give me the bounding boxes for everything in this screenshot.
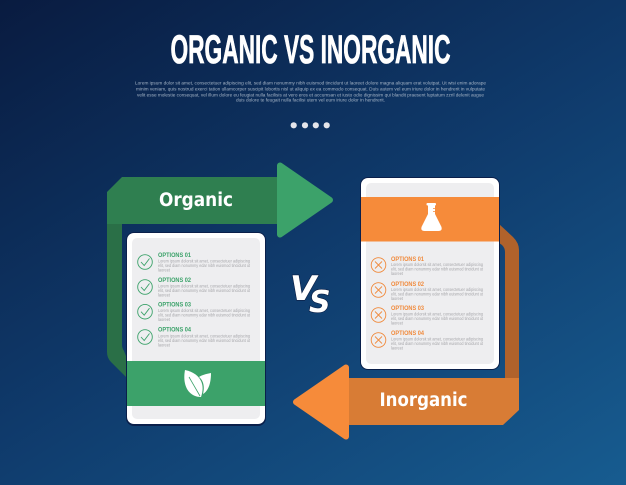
option 2 xyxy=(371,281,484,301)
option 1 xyxy=(138,252,251,272)
intro text block: minim veniam, quis nostrud exerci tation ullamcorper suscipit lobortis nisl ut aliquip ex ea commodo consequat. Duis autem vel eum iriure dolor in hendrerit in vulputate xyxy=(136,86,486,92)
option 4: Lorem ipsum dolorsit sit amet, consectetuer adipiscing xyxy=(158,333,251,338)
option 1: OPTIONS 01 xyxy=(391,256,425,263)
option 4: Lorem ipsum dolorsit sit amet, consectetuer adipiscing xyxy=(391,336,484,342)
option 2: laoreet xyxy=(158,292,171,298)
option 4: OPTIONS 04 xyxy=(158,326,192,334)
option 4: OPTIONS 04 xyxy=(391,330,425,337)
pagination dots xyxy=(291,122,330,128)
option 2: elit, sed diam nonummy edar nibh euismod tincidunt ut xyxy=(391,292,484,296)
VS emblem: V xyxy=(290,269,319,309)
intro text block: duis dolore te feugait nulla facilisi utem vel eum iriure dolor in hendrerit. xyxy=(236,98,385,102)
option 3: OPTIONS 03 xyxy=(158,302,192,308)
option 3 xyxy=(371,305,484,326)
option 1: Lorem ipsum dolorsit sit amet, consectetuer adipiscing xyxy=(158,258,251,264)
arrow: organic xyxy=(107,166,330,379)
option 2: Lorem ipsum dolorsit sit amet, consectetuer adipiscing xyxy=(391,287,484,292)
option 2: elit, sed diam nonummy edar nibh euismod tincidunt ut xyxy=(158,288,251,293)
option 4: laoreet xyxy=(158,342,171,347)
option 2: Lorem ipsum dolorsit sit amet, consectetuer adipiscing xyxy=(158,284,251,288)
option 3: elit, sed diam nonummy edar nibh euismod tincidunt ut xyxy=(391,316,484,321)
option 1: elit, sed diam nonummy edar nibh euismod tincidunt ut xyxy=(158,263,251,268)
option 1: laoreet xyxy=(158,268,171,272)
icon: leaves xyxy=(184,370,211,397)
option 1: OPTIONS 01 xyxy=(158,252,192,259)
intro text block xyxy=(135,80,487,102)
option 1: Lorem ipsum dolorsit sit amet, consectetuer adipiscing xyxy=(391,262,484,267)
option 1 xyxy=(371,256,484,276)
option 4 xyxy=(371,330,484,350)
option 4: laoreet xyxy=(391,346,404,350)
option 3: Lorem ipsum dolorsit sit amet, consectetuer adipiscing xyxy=(391,312,484,316)
organic band xyxy=(127,361,265,406)
option 1: laoreet xyxy=(391,271,404,276)
option 2: OPTIONS 02 xyxy=(158,277,192,284)
option 2: laoreet xyxy=(391,296,404,301)
option 2 xyxy=(138,277,251,298)
icon: flask xyxy=(421,203,442,231)
intro text block: Lorem ipsum dolor sit amet, consectetuer adipiscing elit, sed diam nonummy nibh euismod tincidunt ut laoreet dolore magna aliquam erat volutpat. Ut wisi enim adorape xyxy=(135,80,487,86)
inorganic band xyxy=(361,197,499,242)
option 4: elit, sed diam nonummy edar nibh euismod tincidunt ut xyxy=(391,341,484,346)
arrow label: Inorganic: Inorganic xyxy=(380,390,468,411)
option 1: elit, sed diam nonummy edar nibh euismod tincidunt ut xyxy=(391,266,484,272)
arrow: inorganic xyxy=(296,224,519,436)
intro text block: velit esse molestie consequat, vel illum dolore eu feugiat nulla facilisis at vero eros et accumsan et iusto odio dignissim qui blandit praesent luptatum zzril delenit augue xyxy=(137,92,485,98)
option 4 xyxy=(138,326,251,347)
option 3: Lorem ipsum dolorsit sit amet, consectetuer adipiscing xyxy=(158,308,251,313)
option 4: elit, sed diam nonummy edar nibh euismod tincidunt ut xyxy=(158,338,251,343)
arrow label: Organic: Organic xyxy=(159,190,233,211)
option 3: elit, sed diam nonummy edar nibh euismod tincidunt ut xyxy=(158,312,251,317)
panel: organic card xyxy=(126,232,266,426)
option 3: laoreet xyxy=(158,317,171,322)
VS emblem xyxy=(290,269,331,320)
option 3 xyxy=(138,302,251,322)
option 3: laoreet xyxy=(391,320,404,326)
VS emblem: S xyxy=(309,285,331,320)
option 3: OPTIONS 03 xyxy=(391,305,425,312)
panel: inorganic card xyxy=(360,177,500,370)
option 2: OPTIONS 02 xyxy=(391,281,425,288)
